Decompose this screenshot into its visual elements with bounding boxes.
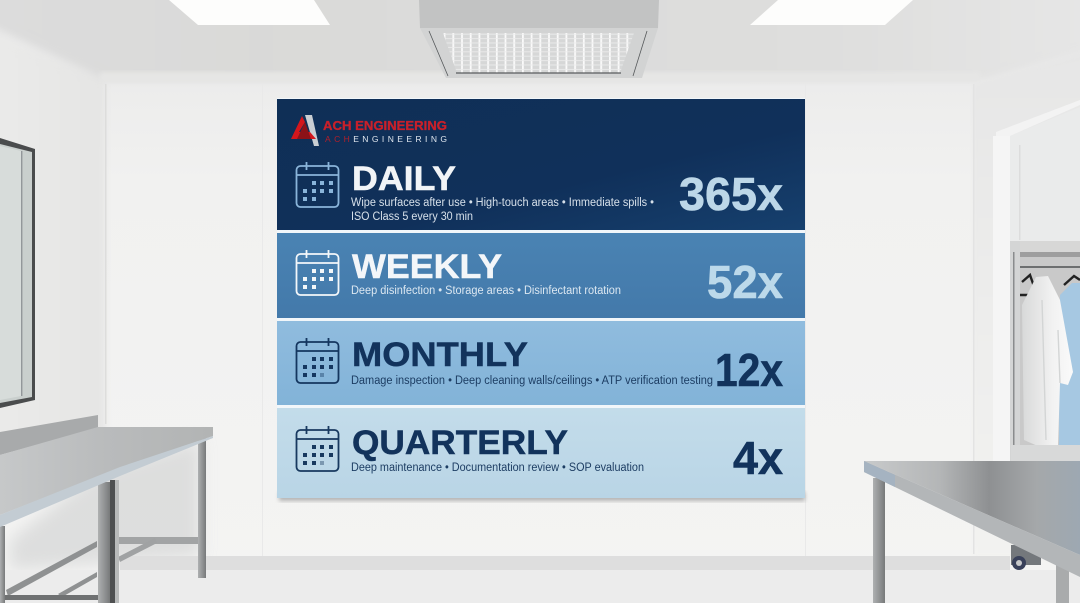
logo mark [291,115,319,146]
description: Wipe surfaces after use • High-touch areas • Immediate spills • [351,197,654,209]
band: monthly [277,321,805,405]
poster shadow [279,492,805,501]
band: daily [277,99,805,230]
wall window [0,138,35,408]
left wall [0,30,105,455]
count: 12x [715,344,783,396]
description: Deep disinfection • Storage areas • Disinfectant rotation [351,285,621,297]
right closet with coats [1010,241,1080,463]
band: quarterly [277,408,805,498]
heading: DAILY [352,160,456,198]
hangers [1020,275,1080,295]
shade under left table [10,440,200,570]
ceiling [0,0,1080,80]
count: 365x [679,168,783,220]
description [351,197,654,223]
heading: MONTHLY [352,336,528,374]
room beyond door [1010,107,1080,242]
icon: calendar [296,162,338,207]
heading: QUARTERLY [352,424,568,462]
icon: calendar [296,426,338,471]
blue coats [1059,283,1080,445]
ceiling air vent [419,0,659,78]
description: ISO Class 5 every 30 min [351,211,473,223]
poster [277,98,805,498]
baseboard and floor [120,556,1010,570]
ceiling light right [750,0,913,25]
count: 52x [707,256,783,308]
logo tagline: ACH ENGINEERING [325,134,447,144]
caster [1011,545,1041,570]
ceiling light left [169,0,330,25]
band: weekly [277,233,805,318]
white coat [1022,276,1073,447]
door pillar [993,136,1010,466]
right wall [973,48,1080,560]
description: Damage inspection • Deep cleaning walls/ceilings • ATP verification testing [351,375,713,387]
logo [291,115,447,146]
icon: calendar [296,338,338,383]
icon: calendar [296,250,338,295]
logo name: ACH ENGINEERING [323,118,447,133]
left steel table [0,415,213,603]
heading: WEEKLY [352,248,502,286]
description: Deep maintenance • Documentation review • SOP evaluation [351,462,644,474]
right steel table [864,461,1080,603]
count: 4x [733,432,783,484]
